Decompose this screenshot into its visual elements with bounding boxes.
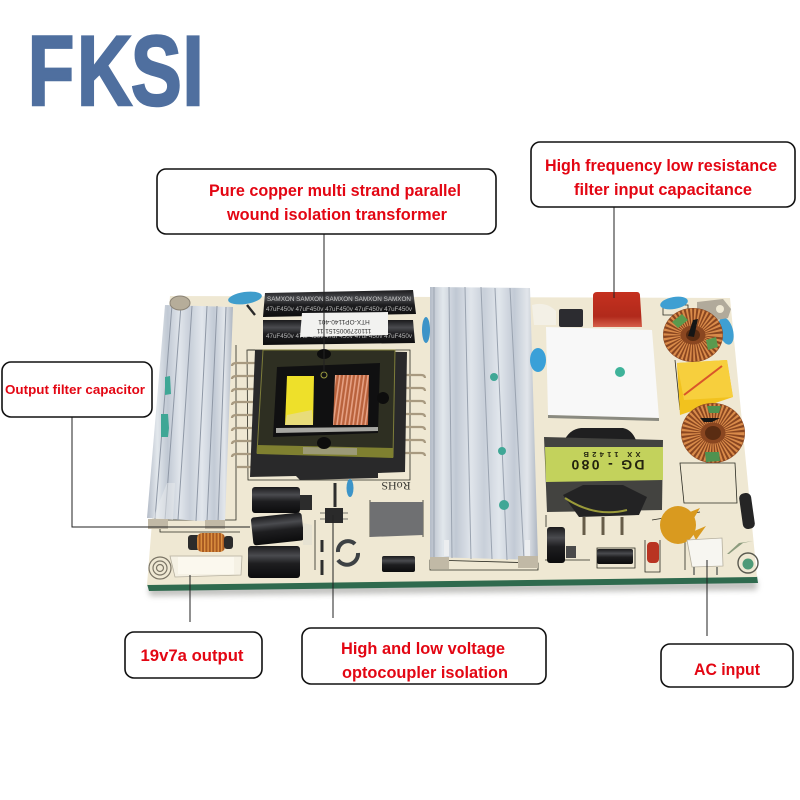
blue ceramic capacitor: top left (227, 290, 263, 315)
circuit board (147, 296, 757, 585)
transformer marking: DG - 080 (571, 457, 644, 473)
varistor (660, 506, 706, 544)
mounting hole: bottom left (149, 557, 171, 579)
small capacitors: bottom right (547, 527, 659, 564)
board shadow (148, 580, 757, 596)
board edge (147, 576, 758, 591)
silkscreen traces (150, 305, 737, 572)
electrolytic capacitors: top row: SAMXON SAMXON SAMXON SAMXON SAMXON (267, 296, 411, 303)
electrolytic capacitors: top row: 47uF450v 47uF450v 47uF450v 47uF450v 47uF450v (266, 307, 412, 313)
callout: optocoupler isolation (302, 628, 546, 684)
green glue dots (161, 376, 171, 437)
blue capacitor: mid top (422, 317, 430, 343)
callout: optocoupler isolation: optocoupler isolation (342, 664, 508, 682)
toroid coil: top (663, 308, 723, 362)
white output connector (170, 556, 242, 577)
heat sink: center (430, 287, 538, 569)
callout: isolation transformer: Pure copper multi strand parallel (209, 182, 461, 200)
mounting screw: top left (170, 296, 190, 310)
callout: input capacitance: filter input capacitance (574, 181, 752, 199)
leader line: output filter capacitor (72, 417, 250, 527)
toroid coil: bottom (681, 403, 745, 463)
logo: FKSI: K (77, 15, 132, 126)
callout: 19v7a output: 19v7a output (140, 647, 244, 665)
yellow X capacitor (677, 360, 733, 415)
blue ceramic capacitors: top right (659, 295, 736, 346)
silkscreen slots (322, 483, 335, 575)
electrolytic capacitors: top row: 47uF450v 47uF450v 47uF450v 47uF450v 47uF450v (266, 334, 412, 340)
white product sticker (300, 312, 388, 337)
logo: FKSI (28, 15, 204, 126)
small IC and white glue (532, 304, 583, 327)
leader line: optocoupler (332, 515, 334, 618)
copper winding (333, 375, 369, 425)
heat sink feet (430, 556, 538, 569)
transformer body (250, 350, 407, 480)
yellow insulation (285, 376, 314, 425)
heat sink feet (148, 519, 225, 529)
logo: FKSI: I (182, 15, 204, 126)
test point (321, 372, 327, 378)
callout: isolation transformer (157, 169, 496, 234)
transformer marking (571, 450, 644, 473)
white product sticker: HTX-OP1140-401 (318, 318, 370, 325)
leader line: 19v7a output (189, 575, 191, 622)
leader line: AC input (706, 560, 708, 636)
transformer marking: XX 1142B (583, 450, 640, 459)
blue disc capacitor (530, 348, 546, 372)
mounting hole: bottom right (727, 541, 758, 573)
main transformer (232, 349, 425, 480)
white product sticker: 1110279005151 11 (316, 327, 371, 334)
callout: AC input: AC input (694, 661, 760, 679)
mounting bracket: top right (697, 299, 731, 320)
callout: isolation transformer: wound isolation transformer (226, 206, 448, 224)
product photo: power supply board (147, 287, 758, 596)
green glue dots (490, 373, 498, 381)
callout: output filter capacitor (2, 362, 152, 417)
heat sink: left (147, 305, 233, 529)
leader line: input capacitance (613, 207, 615, 298)
grey film capacitor (370, 502, 423, 537)
callout: input capacitance (531, 142, 795, 207)
red film capacitor (593, 292, 642, 327)
white heat spreader plate (546, 327, 659, 421)
transformer pins (232, 363, 425, 467)
leader line: transformer (323, 234, 325, 372)
small electrolytic capacitor: bottom center (382, 556, 415, 572)
callout: input capacitance: High frequency low resistance (545, 157, 777, 175)
optocoupler (320, 508, 348, 523)
black fuse resistor (739, 492, 755, 530)
RoHS mark: RoHS (381, 479, 411, 493)
callout: optocoupler isolation: High and low voltage (341, 640, 505, 658)
silkscreen logo (338, 541, 358, 565)
logo: FKSI: S (131, 15, 182, 126)
callout: output filter capacitor: Output filter capacitor (5, 383, 145, 397)
callout: AC input (661, 644, 793, 687)
white AC connector (687, 538, 723, 575)
electrolytic capacitors: top row (263, 290, 416, 345)
inductor (188, 533, 233, 552)
output capacitors (248, 487, 312, 578)
transformer window (273, 363, 380, 437)
secondary transformer (544, 428, 663, 535)
small blue capacitor: center (346, 479, 354, 497)
logo: FKSI: F (28, 15, 74, 126)
callout: 19v7a output (125, 632, 262, 678)
